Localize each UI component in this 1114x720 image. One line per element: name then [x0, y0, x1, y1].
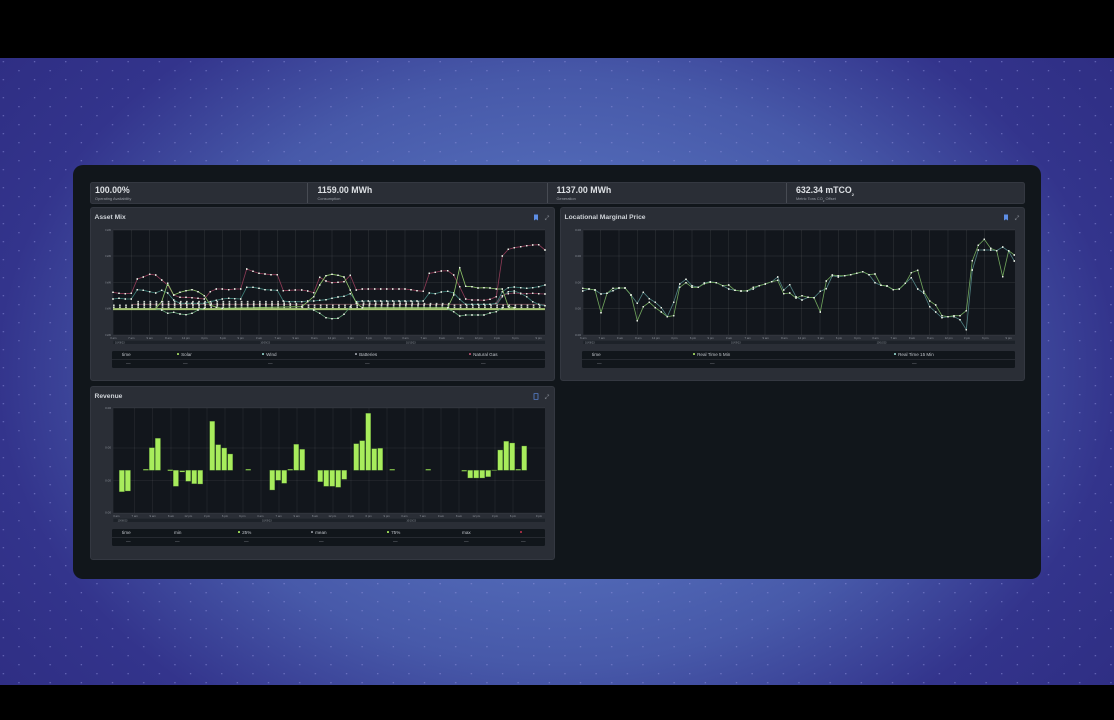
- x axis labels: 12 pm: [475, 336, 483, 340]
- x axis labels: 6 pm: [366, 514, 372, 518]
- x axis labels: 3 am: [726, 336, 733, 340]
- x axis labels: 7 am: [421, 336, 427, 340]
- icon: expand: [544, 394, 549, 399]
- x axis labels: 9 am: [909, 336, 916, 340]
- x axis labels: 8 am: [168, 514, 175, 518]
- x axis labels: 12 pm: [945, 336, 953, 340]
- x axis labels: 3 pm: [492, 514, 499, 518]
- legend table: —: [710, 361, 715, 366]
- legend table: —: [597, 361, 602, 366]
- series: wind second: [496, 291, 545, 306]
- KPI: generation: Generation: [556, 196, 576, 200]
- x axis labels: 9 pm: [1006, 336, 1012, 340]
- KPI: generation: 1137.00 MWh: [556, 185, 611, 195]
- x axis labels: 7 am: [128, 336, 135, 340]
- x axis labels: 6 pm: [366, 336, 373, 340]
- panel: asset mix: [90, 207, 555, 381]
- icon: expand: [1014, 216, 1019, 220]
- stats table: —: [126, 539, 131, 544]
- series: real time 5 min: [583, 239, 1014, 321]
- panel: locational marginal price: [560, 207, 1025, 381]
- x axis labels: [110, 336, 542, 340]
- x axis labels: 6 pm: [690, 336, 697, 340]
- x axis labels: 8 am: [781, 336, 788, 340]
- KPI: operating availability: [95, 185, 132, 201]
- date strip: 10/08/23: [118, 520, 128, 523]
- x axis labels: 9 pm: [536, 336, 542, 340]
- x axis labels: 9 pm: [384, 514, 390, 518]
- x axis labels: 9 am: [294, 514, 300, 518]
- x axis labels: 3 am: [110, 336, 117, 340]
- x axis labels: 6 pm: [510, 514, 517, 518]
- icon: bookmark: [534, 214, 538, 220]
- stats table: min: [174, 530, 181, 534]
- stats table: —: [319, 539, 324, 544]
- x axis labels: 6 pm: [512, 336, 519, 340]
- stats table: —: [521, 539, 526, 544]
- legend table: —: [183, 361, 188, 366]
- stats table: —: [464, 539, 469, 544]
- date strip: 10/10/23: [877, 341, 887, 344]
- legend table: —: [126, 361, 131, 366]
- stats table: 75%: [391, 530, 400, 534]
- icon: bookmark outline: [534, 393, 538, 400]
- series: batteries: [156, 308, 204, 315]
- x axis labels: 7 am: [420, 514, 426, 518]
- x axis labels: 12 pm: [184, 514, 193, 518]
- legend table: —: [912, 361, 917, 366]
- x axis labels: 7 am: [745, 336, 751, 340]
- date strip: 10/08/23: [585, 341, 595, 344]
- stats table: mean: [315, 530, 327, 534]
- legend table: time: [122, 352, 131, 356]
- x axis labels: 9 am: [438, 514, 445, 518]
- x axis labels: 3 pm: [964, 336, 971, 340]
- KPI: CO2 offset: [786, 183, 1024, 202]
- x axis labels: 3 am: [256, 336, 263, 340]
- x axis labels: [113, 514, 543, 518]
- KPI strip: [90, 182, 1025, 204]
- x axis labels: 3 pm: [494, 336, 501, 340]
- x axis labels: 6 pm: [222, 514, 229, 518]
- x axis labels: 3 am: [872, 336, 879, 340]
- x axis labels: 12 pm: [328, 514, 337, 518]
- series: natural gas: [113, 245, 545, 300]
- x axis labels: 9 pm: [708, 336, 714, 340]
- x axis labels: [580, 336, 1012, 340]
- series: batteries second: [308, 307, 350, 319]
- KPI: consumption: Consumption: [318, 196, 340, 200]
- legend table: Real Time 15 Min: [898, 352, 934, 356]
- x axis labels: 3 pm: [671, 336, 678, 340]
- series: batteries third: [448, 308, 502, 316]
- date strip: [113, 519, 545, 523]
- KPI: operating availability: 100.00%: [95, 185, 130, 195]
- x axis labels: 3 pm: [201, 336, 208, 340]
- legend table: [582, 351, 1015, 368]
- bars: [119, 414, 527, 492]
- legend table: Natural Gas: [473, 352, 498, 356]
- x axis labels: 9 pm: [238, 336, 244, 340]
- x axis labels: 9 pm: [239, 514, 246, 518]
- panel: revenue: [90, 386, 555, 560]
- stats table: 25%: [242, 530, 251, 534]
- legend table: time: [592, 352, 601, 356]
- x axis labels: 9 am: [617, 336, 624, 340]
- chart: revenue bars: [105, 406, 545, 523]
- legend table: —: [268, 361, 273, 366]
- x axis labels: 8 am: [311, 336, 318, 340]
- x axis labels: 8 am: [165, 336, 172, 340]
- x axis labels: 6 am: [580, 336, 587, 340]
- series: wind: [113, 285, 545, 304]
- x axis labels: 9 am: [147, 336, 153, 340]
- legend table: —: [365, 361, 370, 366]
- x axis labels: 9 am: [439, 336, 446, 340]
- date strip: 10/09/23: [731, 341, 741, 344]
- series: natural gas second: [496, 293, 545, 303]
- x axis labels: 7 am: [132, 514, 138, 518]
- x axis labels: 9 am: [293, 336, 299, 340]
- x axis labels: 6 pm: [982, 336, 989, 340]
- stats table: [112, 529, 545, 546]
- date strip: 10/09/23: [260, 341, 271, 344]
- stats table: max: [462, 530, 471, 534]
- legend table: Wind: [266, 352, 277, 356]
- flat bands: [131, 303, 545, 306]
- stats table: —: [175, 539, 180, 544]
- y axis labels: [97, 228, 111, 337]
- heading: revenue: Revenue: [94, 393, 122, 400]
- flat dotted series: [113, 302, 545, 307]
- legend table: Batteries: [359, 352, 377, 356]
- heading: LMP: Locational Marginal Price: [564, 214, 646, 221]
- stats table: —: [244, 539, 249, 544]
- heading: asset mix: Asset Mix: [94, 214, 126, 221]
- chart: LMP lines: [575, 228, 1015, 344]
- date strip: 10/10/23: [406, 341, 416, 344]
- chart: asset mix lines: [105, 228, 546, 344]
- x axis labels: 12 pm: [472, 514, 481, 518]
- y axis labels: [570, 228, 581, 337]
- x axis labels: 6 pm: [220, 336, 227, 340]
- x axis labels: 3 pm: [348, 514, 355, 518]
- KPI: operating availability: Operating Availability: [95, 196, 131, 200]
- dashboard container: [73, 165, 1041, 579]
- x axis labels: 3 am: [401, 514, 408, 518]
- x axis labels: 12 pm: [652, 336, 661, 340]
- KPI: generation: [547, 183, 786, 202]
- x axis labels: 12 pm: [182, 336, 191, 340]
- KPI: consumption: [307, 183, 547, 202]
- x axis labels: 3 am: [402, 336, 409, 340]
- x axis labels: 12 pm: [328, 336, 337, 340]
- stats table: —: [393, 539, 398, 544]
- x axis labels: 7 am: [891, 336, 897, 340]
- date strip: 10/09/23: [262, 520, 272, 523]
- KPI: CO2 offset: 632.34 mTCO2: [796, 185, 854, 197]
- x axis labels: 7 am: [275, 336, 281, 340]
- series: solar: [156, 268, 514, 308]
- x axis labels: 7 am: [599, 336, 605, 340]
- x axis labels: 3 am: [113, 514, 120, 518]
- x axis labels: 3 pm: [204, 514, 211, 518]
- stats table: time: [122, 530, 131, 534]
- y axis labels: [98, 406, 111, 515]
- x axis labels: 8 am: [927, 336, 934, 340]
- KPI: CO2 offset: Metric Tons CO2 Offset: [796, 196, 836, 202]
- date strip: [583, 341, 1015, 344]
- icon: bookmark: [1004, 214, 1008, 220]
- x axis labels: 7 am: [276, 514, 282, 518]
- legend table: [112, 351, 545, 368]
- x axis labels: 9 pm: [384, 336, 391, 340]
- x axis labels: 9 am: [150, 514, 156, 518]
- x axis labels: 3 pm: [348, 336, 354, 340]
- series: real time 15 min: [583, 247, 1014, 330]
- x axis labels: 3 pm: [818, 336, 824, 340]
- date strip: [113, 341, 545, 344]
- x axis labels: 8 am: [456, 514, 463, 518]
- x axis labels: 9 pm: [854, 336, 861, 340]
- legend table: Real Time 5 Min: [697, 352, 730, 356]
- x axis labels: 8 am: [457, 336, 464, 340]
- x axis labels: 8 am: [312, 514, 319, 518]
- x axis labels: 9 am: [763, 336, 769, 340]
- x axis labels: 8 am: [635, 336, 642, 340]
- icon: expand: [544, 216, 549, 220]
- x axis labels: 6 pm: [836, 336, 843, 340]
- x axis labels: 3 am: [257, 514, 264, 518]
- KPI: consumption: 1159.00 MWh: [318, 185, 372, 195]
- legend table: —: [481, 361, 486, 366]
- x axis labels: 9 pm: [536, 514, 543, 518]
- date strip: 10/08/23: [115, 341, 125, 344]
- x axis labels: 12 pm: [798, 336, 807, 340]
- legend table: Solar: [181, 352, 192, 356]
- date strip: 10/10/23: [406, 520, 417, 523]
